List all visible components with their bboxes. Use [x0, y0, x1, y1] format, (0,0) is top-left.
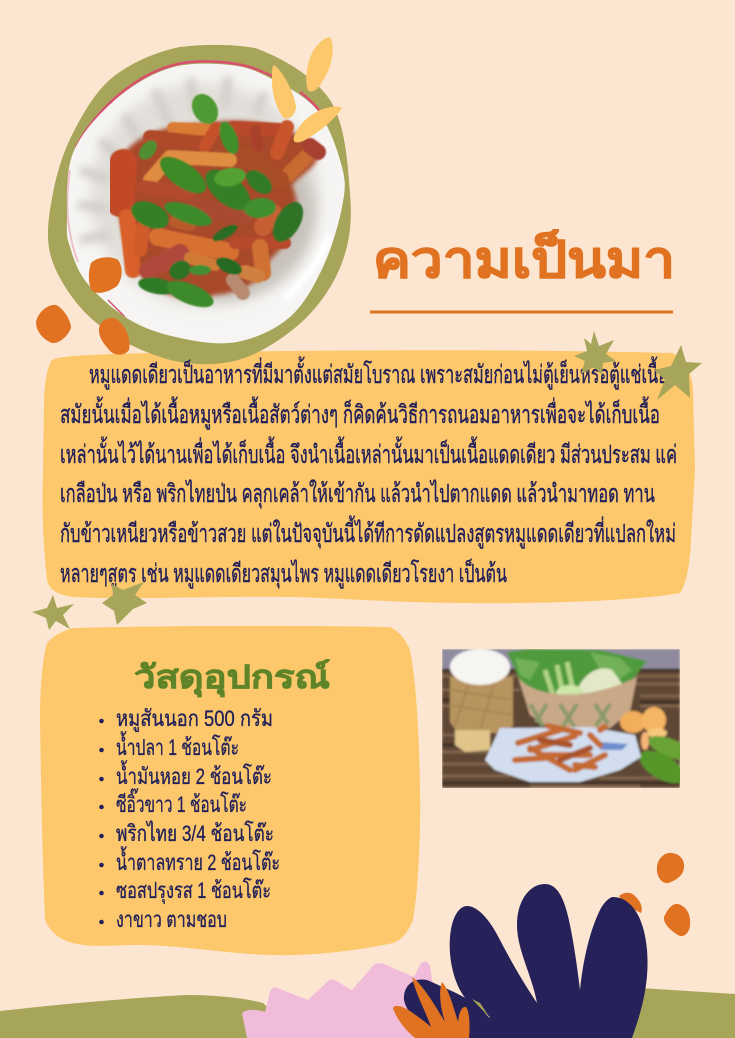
green blob frame [48, 45, 351, 364]
ingredient list: น้ำตาลทราย 2 ช้อนโต๊ะ [116, 846, 280, 875]
decorative yellow leaves [272, 37, 342, 142]
plate [67, 64, 345, 343]
woven basket [518, 677, 637, 731]
olive sliver [472, 999, 490, 1018]
ingredient list: หมูสันนอก 500 กรัม [116, 706, 273, 732]
orange blob behind plant [619, 893, 642, 913]
panel: ingredients [40, 626, 420, 955]
navy plant [404, 884, 648, 1038]
decorative orange blobs by plate [36, 257, 130, 355]
orange plant [393, 977, 470, 1038]
heading underline [370, 310, 673, 314]
photo: fried pork on white plate [67, 61, 345, 343]
decorative orange blobs lower right [657, 853, 690, 936]
cucumbers [648, 734, 680, 762]
ingredient list: น้ำมันหอย 2 ช้อนโต๊ะ [116, 760, 272, 789]
panel background [40, 626, 420, 955]
heading: history: ความเป็นมา [373, 229, 675, 288]
plumeria flower [620, 707, 667, 750]
ingredient list: น้ำปลา 1 ช้อนโต๊ะ [116, 731, 239, 760]
pink flower shape [242, 962, 460, 1038]
ingredient list: ซีอิ๊วขาว 1 ช้อนโต๊ะ [116, 788, 247, 817]
ingredient list [99, 706, 280, 932]
ingredient list: ซอสปรุงรส 1 ช้อนโต๊ะ [116, 877, 271, 904]
bottom olive ground [0, 988, 735, 1038]
fried pork strips [515, 726, 605, 770]
decorative stars [32, 331, 702, 630]
bamboo rice basket [450, 677, 513, 733]
food shadow [135, 130, 315, 300]
blue plate [485, 727, 641, 782]
panel heading: วัสดุอุปกรณ์ [134, 659, 330, 698]
wooden table [442, 670, 680, 788]
panel: history background [42, 350, 695, 603]
photo: pork with sticky rice and vegetables [442, 649, 695, 790]
history body text: หลายๆสูตร เช่น หมูแดดเดียวสมุนไพร หมูแดดเดียวโรยงา เป็นต้น [60, 558, 507, 589]
ingredient list: งาขาว ตามชอบ [116, 907, 227, 932]
ingredient list: พริกไทย 3/4 ช้อนโต๊ะ [116, 820, 274, 846]
vegetables [506, 649, 648, 694]
history body text [60, 356, 677, 589]
pork and basil [114, 89, 318, 313]
plate shading [67, 76, 330, 317]
plate rim [76, 61, 319, 147]
